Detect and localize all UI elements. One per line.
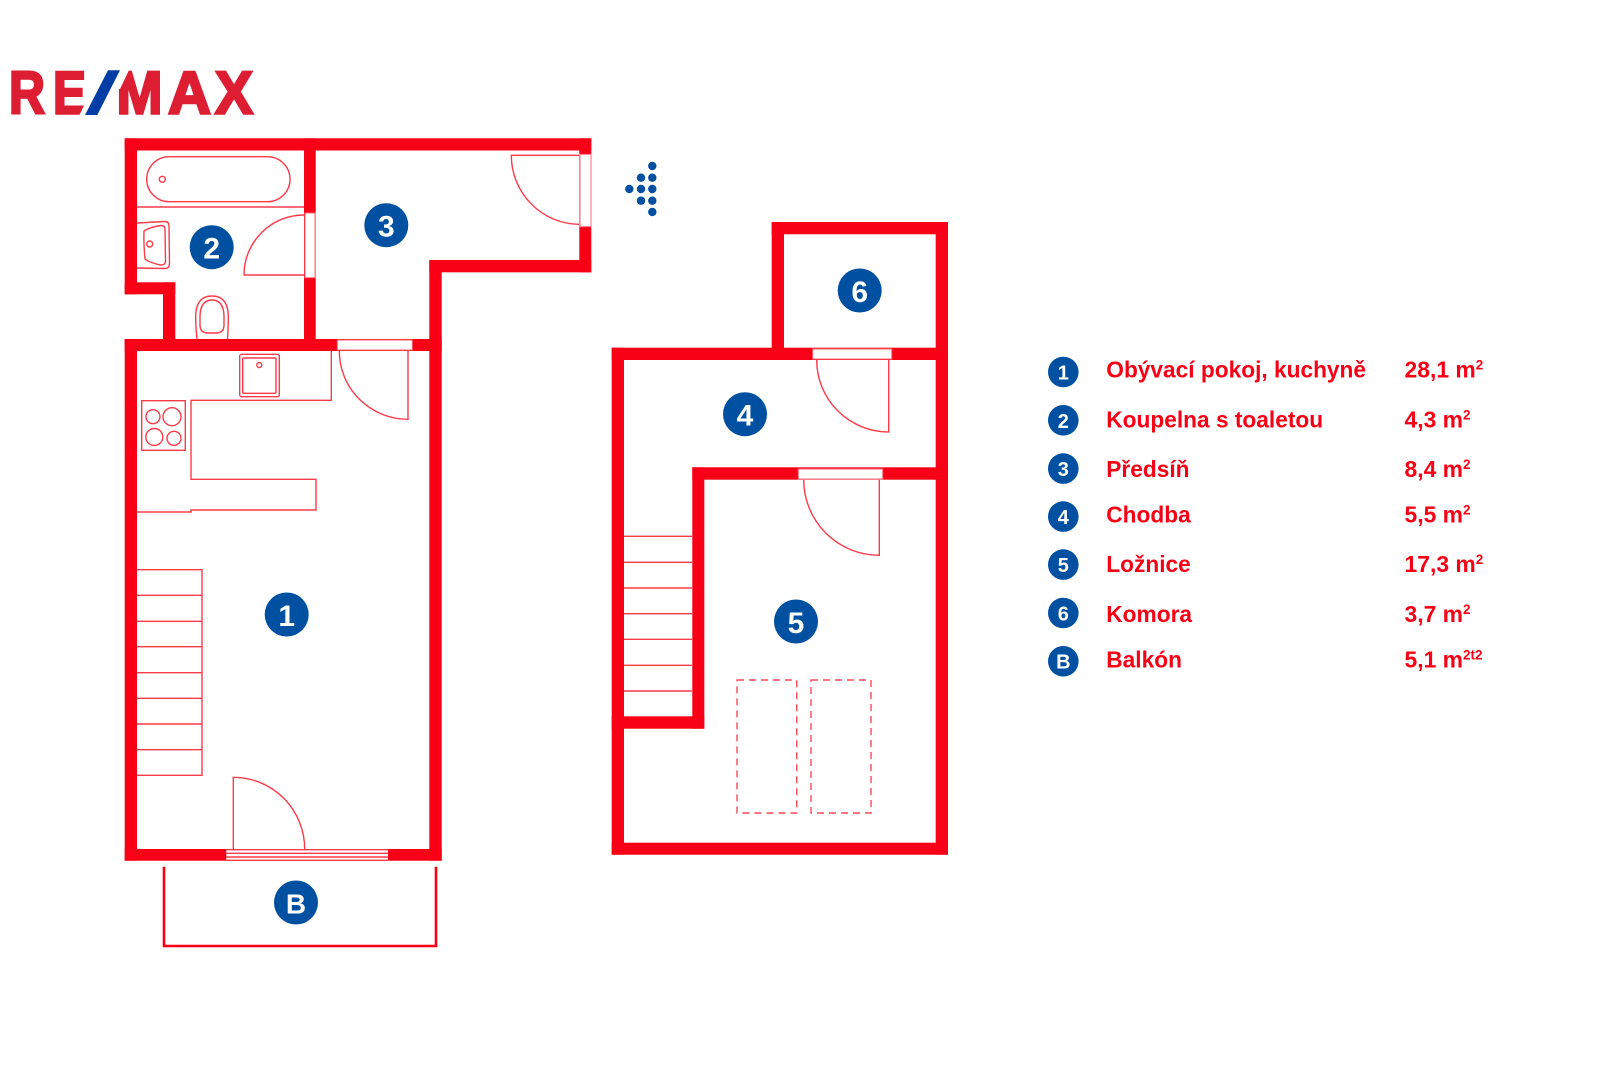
room marker 2: 2 xyxy=(203,232,220,266)
legend row 1: Obývací pokoj, kuchyně xyxy=(1106,356,1366,382)
legend row 2: 2 xyxy=(1058,411,1069,433)
bathtub xyxy=(137,157,304,207)
legend: room list xyxy=(1048,356,1483,677)
door: bedroom xyxy=(798,469,883,555)
legend row B: 5,1 m xyxy=(1404,646,1463,672)
walls: upper level xyxy=(612,222,948,855)
legend row 4: 5,5 m xyxy=(1404,502,1463,528)
legend row 3: 2 xyxy=(1463,457,1471,472)
room marker 6 xyxy=(838,268,882,312)
legend row B xyxy=(1048,646,1483,677)
legend row 5 xyxy=(1048,549,1483,580)
legend row 6 xyxy=(1048,598,1471,628)
legend row 1: 28,1 m xyxy=(1404,356,1476,382)
legend row 4 xyxy=(1048,501,1471,532)
logo: RE/MAX: M xyxy=(116,60,162,127)
legend row 3: 3 xyxy=(1058,459,1069,481)
toilet xyxy=(196,296,228,339)
stairs: upper level xyxy=(624,536,692,691)
balcony window xyxy=(226,849,388,861)
legend row 4: 2 xyxy=(1463,503,1471,518)
legend row 1: 2 xyxy=(1476,357,1483,372)
legend row 4: 4 xyxy=(1058,507,1070,529)
stairs: lower level xyxy=(137,570,202,775)
legend row 5: 17,3 m xyxy=(1404,551,1476,577)
arrow: dotted north marker xyxy=(625,162,656,216)
legend row 5: 5 xyxy=(1058,555,1069,577)
balcony railing xyxy=(164,867,436,946)
room marker 5: 5 xyxy=(788,607,804,640)
room marker 1: 1 xyxy=(278,600,295,633)
logo: RE/MAX: E xyxy=(53,60,86,127)
legend row 4: Chodba xyxy=(1106,502,1191,528)
washbasin xyxy=(137,222,170,268)
room marker 1 xyxy=(265,592,309,636)
legend row 3 xyxy=(1048,453,1471,484)
legend row 2: Koupelna s toaletou xyxy=(1106,406,1323,432)
legend row 5: Ložnice xyxy=(1106,551,1191,577)
room marker B xyxy=(274,880,318,924)
door: entrance xyxy=(511,154,591,227)
logo: RE/MAX: X xyxy=(215,60,253,127)
legend row 2 xyxy=(1048,405,1471,436)
room marker 3: 3 xyxy=(378,210,395,244)
logo: RE/MAX: R xyxy=(9,60,45,127)
kitchen sink xyxy=(240,354,279,397)
door: storage xyxy=(813,349,892,432)
legend row B: 2t2 xyxy=(1463,647,1483,662)
legend row B: Balkón xyxy=(1106,646,1182,672)
floor plan: upper level xyxy=(612,222,948,855)
legend row 3: 8,4 m xyxy=(1404,456,1463,482)
room marker 6: 6 xyxy=(851,276,868,309)
legend row 6: 2 xyxy=(1463,602,1471,617)
walls: lower level xyxy=(125,138,591,861)
floor plan: lower level xyxy=(125,138,591,946)
legend row 1: 1 xyxy=(1058,362,1069,384)
door: balcony xyxy=(233,777,305,849)
legend row 6: 3,7 m xyxy=(1404,601,1463,627)
kitchen counter xyxy=(137,351,331,512)
room marker 5 xyxy=(774,600,818,644)
room marker 2 xyxy=(190,225,234,269)
legend row 2: 2 xyxy=(1463,407,1471,422)
logo: RE/MAX: A xyxy=(168,60,211,127)
door: living room xyxy=(337,340,412,419)
room marker 3 xyxy=(364,203,408,247)
legend row 6: 6 xyxy=(1058,603,1069,625)
legend row 5: 2 xyxy=(1476,552,1483,567)
legend row 1 xyxy=(1048,356,1483,387)
legend row 3: Předsíň xyxy=(1106,456,1190,482)
roof windows (dashed) xyxy=(737,680,871,813)
door: bathroom xyxy=(244,213,315,278)
room marker 4 xyxy=(723,392,767,436)
room marker B: B xyxy=(286,888,306,920)
legend row 2: 4,3 m xyxy=(1404,406,1463,432)
room marker 4: 4 xyxy=(737,400,754,432)
legend row 6: Komora xyxy=(1106,601,1192,627)
cooktop xyxy=(142,401,185,450)
legend row B: B xyxy=(1056,652,1071,674)
logo: RE/MAX xyxy=(9,60,253,127)
